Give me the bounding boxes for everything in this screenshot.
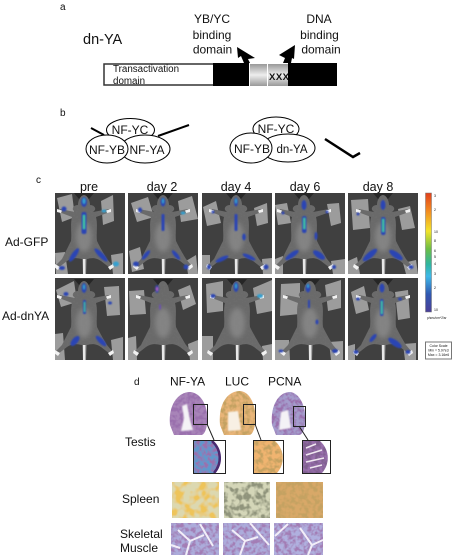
row label Ad-GFP: Ad-GFP bbox=[5, 235, 48, 249]
colour bar legend: p/sec/cm^2/sr bbox=[427, 316, 448, 320]
colour scale box bbox=[426, 342, 452, 359]
colour scale box: Max = 3.16e6 bbox=[428, 353, 449, 357]
panel label b: b bbox=[60, 108, 66, 119]
imaging panels row 2 bbox=[54, 278, 418, 361]
complex: dn-YA without DNA: NF-YB bbox=[234, 142, 270, 156]
complex: NF-Y with DNA bbox=[86, 118, 189, 163]
row label Skeletal Muscle: Skeletal bbox=[120, 527, 163, 541]
colour scale box: Color Scale bbox=[429, 344, 448, 348]
colour bar legend: 6 bbox=[434, 249, 436, 253]
column headings: day 8 bbox=[363, 180, 393, 194]
column headings d: PCNA bbox=[268, 374, 301, 388]
column headings d: NF-YA bbox=[170, 374, 205, 388]
complex: NF-Y with DNA: NF-YA bbox=[129, 143, 165, 157]
testis PCNA bbox=[272, 392, 330, 474]
heading: dn-YA: dn-YA bbox=[83, 32, 123, 48]
row label Ad-dnYA: Ad-dnYA bbox=[2, 309, 49, 323]
arrow: DNA domain bbox=[279, 45, 295, 63]
domain bar: Transactivation bbox=[113, 64, 179, 75]
spleen images bbox=[172, 482, 323, 518]
testis LUC bbox=[220, 391, 284, 474]
label: YB/YC binding domain: binding bbox=[193, 28, 231, 42]
column headings d: LUC bbox=[225, 374, 249, 388]
colour bar legend: 5 bbox=[434, 255, 436, 259]
domain bar: domain bbox=[113, 76, 145, 87]
domain bar: XXX bbox=[269, 72, 290, 83]
colour bar legend: 2 bbox=[434, 208, 436, 212]
column headings d bbox=[170, 374, 301, 388]
panel label c: c bbox=[36, 175, 41, 186]
DNA bent line bbox=[325, 139, 360, 157]
colour bar legend: 8 bbox=[434, 239, 436, 243]
colour bar legend bbox=[426, 193, 448, 320]
label: YB/YC binding domain: domain bbox=[193, 42, 232, 56]
testis NF-YA bbox=[170, 392, 226, 474]
complex: dn-YA without DNA: dn-YA bbox=[276, 144, 308, 156]
label: DNA binding domain: DNA bbox=[306, 12, 332, 26]
imaging panels row 1 bbox=[54, 193, 418, 275]
panel label d: d bbox=[134, 377, 140, 388]
panel label a: a bbox=[60, 2, 66, 13]
colour scale box: Min = 5.97e3 bbox=[428, 348, 449, 352]
skeletal muscle images bbox=[171, 523, 323, 555]
arrow: YB/YC domain bbox=[237, 47, 255, 63]
column headings: day 4 bbox=[221, 180, 251, 194]
complex: NF-Y with DNA: NF-YB bbox=[89, 143, 125, 157]
row label Spleen: Spleen bbox=[122, 492, 159, 506]
column headings: day 6 bbox=[290, 180, 320, 194]
label: DNA binding domain: domain bbox=[301, 42, 341, 56]
colour bar legend: 10 bbox=[434, 308, 438, 312]
colour bar legend: 3 bbox=[434, 272, 436, 276]
column headings: pre bbox=[80, 180, 98, 194]
colour bar legend: 3 bbox=[434, 194, 436, 198]
column headings bbox=[80, 180, 393, 194]
label: DNA binding domain: binding bbox=[300, 28, 339, 42]
column headings: day 2 bbox=[147, 180, 177, 194]
row label Skeletal Muscle: Muscle bbox=[120, 541, 158, 555]
complex: dn-YA without DNA bbox=[230, 117, 315, 163]
domain bar bbox=[104, 63, 337, 87]
label: YB/YC binding domain: YB/YC bbox=[194, 12, 230, 26]
row label Testis: Testis bbox=[125, 435, 156, 449]
complex: dn-YA without DNA: NF-YC bbox=[258, 122, 295, 136]
colour bar legend: 2 bbox=[434, 286, 436, 290]
complex: NF-Y with DNA: NF-YC bbox=[112, 123, 149, 137]
colour bar legend: 10 bbox=[434, 230, 438, 234]
colour bar legend: 4 bbox=[434, 262, 436, 266]
